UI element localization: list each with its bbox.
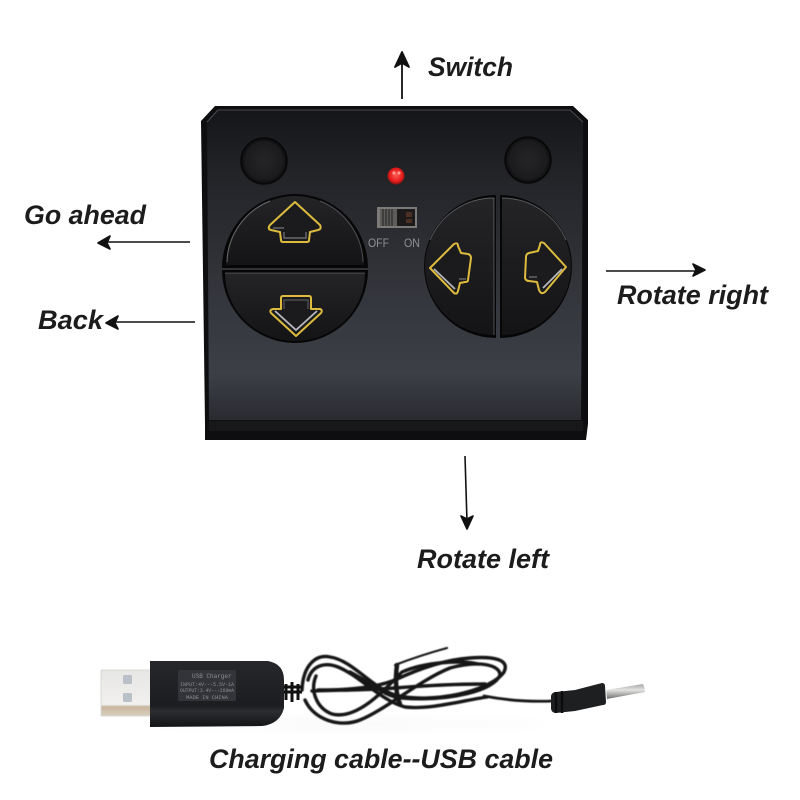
icon: right arrow: [525, 242, 566, 293]
charger dongle: [150, 661, 284, 727]
panel: controller casing: [201, 106, 588, 440]
arrow: switch: [395, 52, 409, 99]
label: rotate left: Rotate left: [417, 544, 550, 574]
label: rotate right: Rotate right: [617, 280, 769, 310]
icon: red power LED: [388, 168, 404, 184]
arrow: go ahead: [98, 236, 190, 249]
button: rotate left: [424, 195, 496, 338]
icon: right round knob: [505, 137, 551, 183]
label: go ahead: Go ahead: [24, 200, 147, 230]
arrow: rotate right: [606, 264, 705, 276]
label: charging cable: Charging cable--USB cable: [209, 744, 553, 774]
dongle label text: INPUT:4V---5.5V-1A: [180, 682, 234, 688]
controller: remote control body: [201, 106, 588, 440]
power switch: [368, 207, 420, 250]
arrow: back: [106, 316, 195, 329]
icon: DC barrel plug: [551, 683, 645, 713]
dongle label text: [180, 673, 234, 701]
dongle label text: USB Charger: [192, 673, 232, 680]
soft shadow under cable: [150, 719, 550, 729]
dongle label text: MADE IN CHINA: [186, 695, 228, 701]
arrow: rotate left: [461, 456, 473, 529]
label: back: Back: [38, 305, 105, 335]
label: ON: ON: [404, 236, 420, 250]
icon: USB plug: [101, 670, 151, 716]
button: rotate right: [500, 195, 572, 338]
dongle label text: OUTPUT:3.4V---260mA: [180, 688, 234, 694]
label: switch: Switch: [428, 52, 513, 82]
cable loops: [302, 648, 553, 723]
button: go ahead (up): [222, 194, 368, 268]
icon: down arrow: [270, 296, 322, 336]
label: OFF: OFF: [368, 236, 389, 250]
icon: up arrow: [269, 202, 321, 242]
strain relief: [284, 682, 302, 702]
USB charging cable: [101, 648, 645, 729]
icon: left round knob: [241, 138, 287, 184]
button: back (down): [222, 270, 368, 343]
icon: left arrow: [430, 243, 471, 294]
